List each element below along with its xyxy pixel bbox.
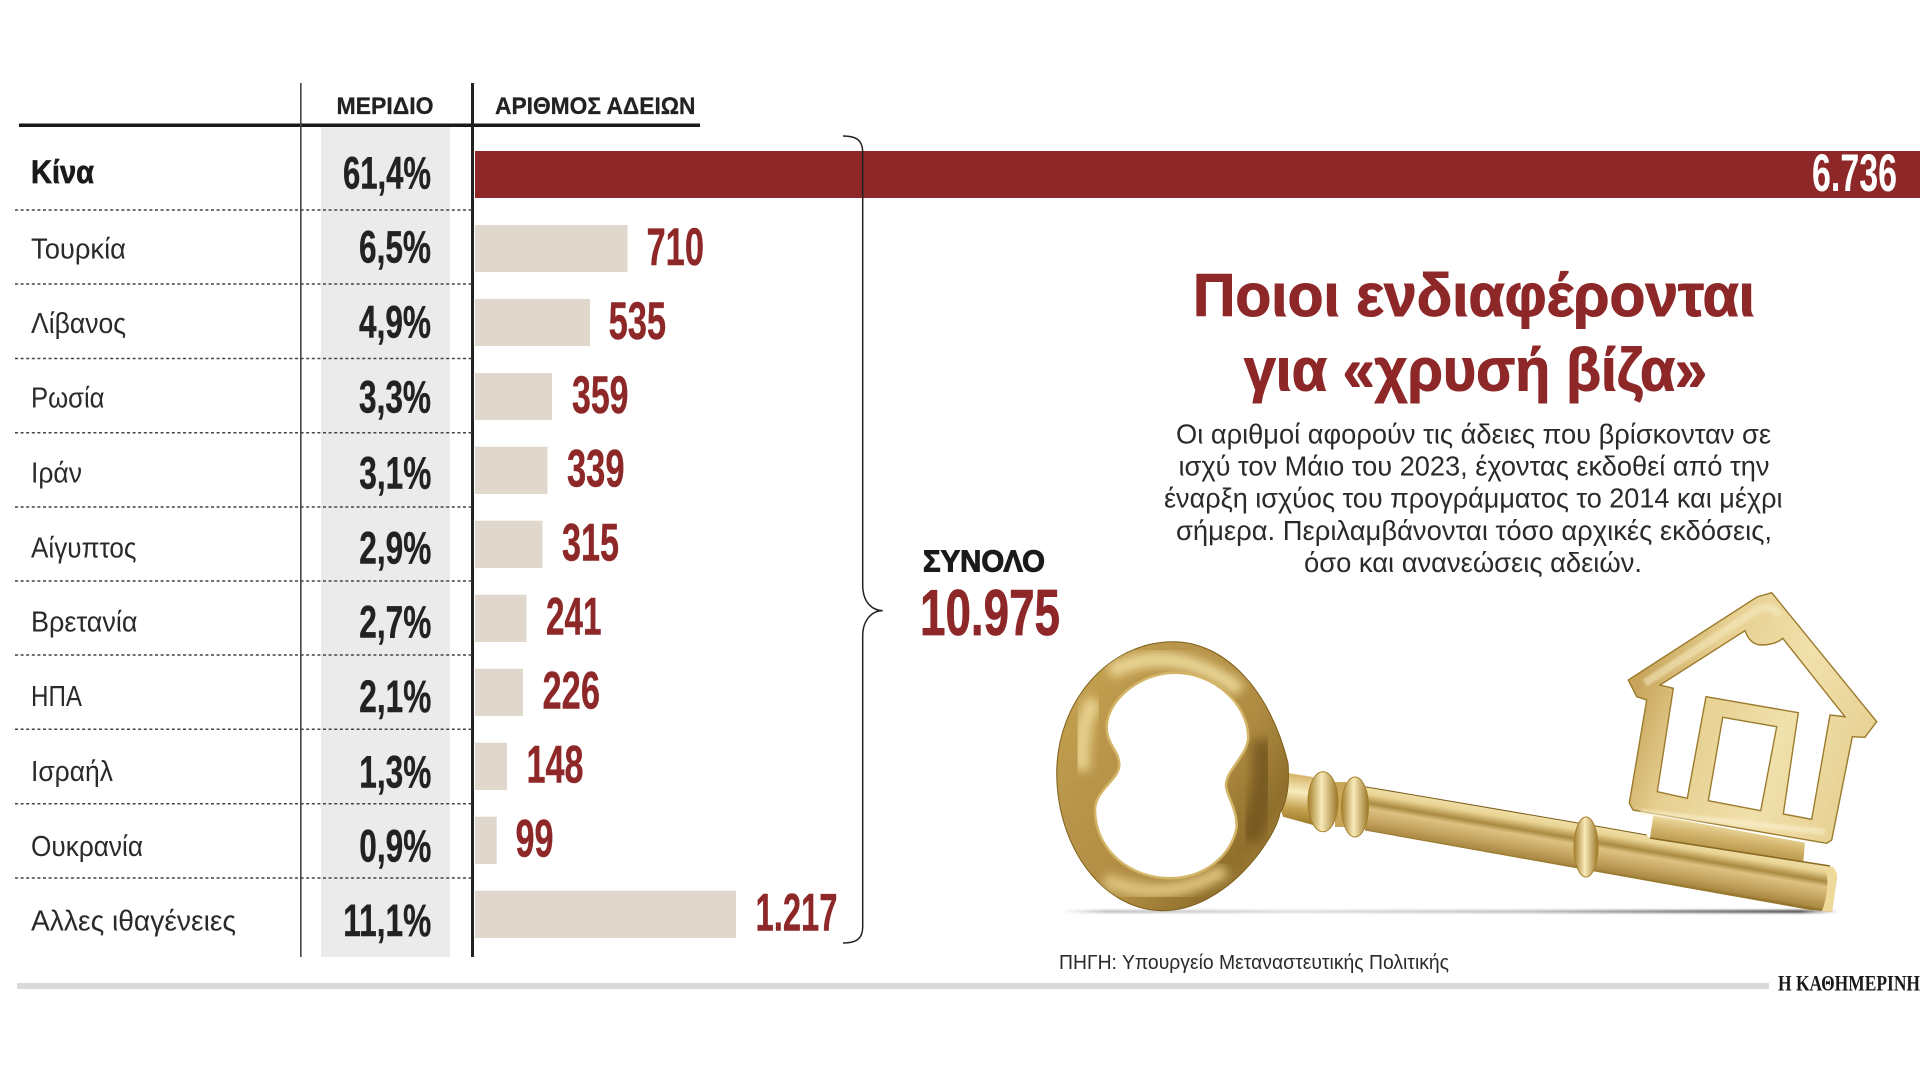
key bit joining the house	[1650, 815, 1805, 862]
illustration: golden key with house	[1057, 593, 1877, 913]
footer rule	[17, 983, 1769, 989]
title: για «χρυσή βίζα»	[1244, 336, 1707, 404]
row: USA: 226	[542, 662, 600, 721]
description text: ισχύ τον Μάιο του 2023, έχοντας εκδοθεί από την	[1178, 451, 1770, 482]
row: China	[31, 144, 1920, 203]
row: other nationalities: 1.217	[756, 884, 838, 943]
total callout	[920, 544, 1060, 649]
row: Israel	[31, 736, 584, 797]
description text: Οι αριθμοί αφορούν τις άδειες που βρίσκονταν σε	[1176, 418, 1771, 450]
row: Russia: 359	[572, 366, 628, 425]
row: Ukraine: 0,9%	[359, 821, 431, 872]
row: Israel: Ισραήλ	[31, 756, 113, 788]
key house head	[1628, 593, 1877, 843]
row: Egypt	[31, 514, 619, 573]
source line: ΠΗΓΗ: Υπουργείο Μεταναστευτικής Πολιτικής	[1059, 951, 1449, 974]
row: Russia: Ρωσία	[31, 382, 104, 414]
row: Turkey: 710	[646, 218, 704, 277]
share column background	[321, 127, 450, 957]
row: Ukraine: 99	[516, 810, 554, 869]
row: Russia: 3,3%	[359, 372, 431, 422]
row: Egypt: Αίγυπτος	[31, 532, 137, 564]
key bow ring	[1057, 642, 1288, 911]
key collar and rings	[1277, 772, 1598, 877]
row: Lebanon	[31, 292, 666, 351]
description text: σήμερα. Περιλαμβάνονται τόσο αρχικές εκδόσεις,	[1176, 515, 1772, 546]
row: Turkey: 6,5%	[359, 222, 431, 273]
row: USA: 2,1%	[359, 671, 431, 722]
row: China: Κίνα	[31, 154, 94, 190]
row: Egypt: 315	[562, 514, 619, 573]
title: Ποιοι ενδιαφέρονται	[1193, 262, 1755, 329]
row: Egypt: 2,9%	[359, 522, 431, 573]
row: Britain: 2,7%	[359, 597, 431, 648]
row: Britain: 241	[546, 588, 602, 647]
table header rule and column dividers	[19, 83, 700, 957]
column heading: share: ΜΕΡΙΔΙΟ	[336, 93, 434, 120]
row: other nationalities: Αλλες ιθαγένειες	[31, 906, 236, 938]
row: Lebanon: 535	[609, 292, 666, 351]
brace grouping all rows	[843, 136, 883, 943]
column heading: number of permits: ΑΡΙΘΜΟΣ ΑΔΕΙΩΝ	[495, 93, 696, 120]
row: Britain	[31, 588, 602, 648]
total callout: ΣΥΝΟΛΟ	[923, 544, 1045, 578]
row: China: 61,4%	[343, 147, 431, 198]
row: other nationalities	[31, 884, 838, 946]
row: other nationalities: 11,1%	[343, 895, 431, 946]
row: Israel: 148	[526, 736, 584, 795]
row: Turkey: Τουρκία	[31, 234, 126, 266]
row: Iran: 339	[567, 440, 624, 499]
row: USA	[31, 662, 600, 722]
row: Ukraine	[31, 810, 554, 872]
description text	[1164, 418, 1782, 578]
key shadow	[1060, 910, 1840, 913]
row: Lebanon: 4,9%	[359, 296, 431, 348]
total callout: 10.975	[920, 576, 1060, 649]
row: Lebanon: Λίβανος	[31, 308, 126, 340]
row: Israel: 1,3%	[359, 746, 431, 797]
description text: όσο και ανανεώσεις αδειών.	[1304, 547, 1642, 578]
row: Iran: 3,1%	[359, 447, 431, 498]
key shaft	[1365, 787, 1837, 912]
description text: έναρξη ισχύος του προγράμματος το 2014 και μέχρι	[1164, 483, 1782, 514]
row: Iran: Ιράν	[31, 457, 82, 489]
row: Iran	[31, 440, 624, 499]
row: Britain: Βρετανία	[31, 607, 138, 639]
row: USA: ΗΠΑ	[31, 681, 83, 713]
row: Ukraine: Ουκρανία	[31, 831, 143, 863]
title	[1193, 262, 1755, 404]
row: Turkey	[31, 218, 704, 277]
row: Russia	[31, 366, 628, 425]
